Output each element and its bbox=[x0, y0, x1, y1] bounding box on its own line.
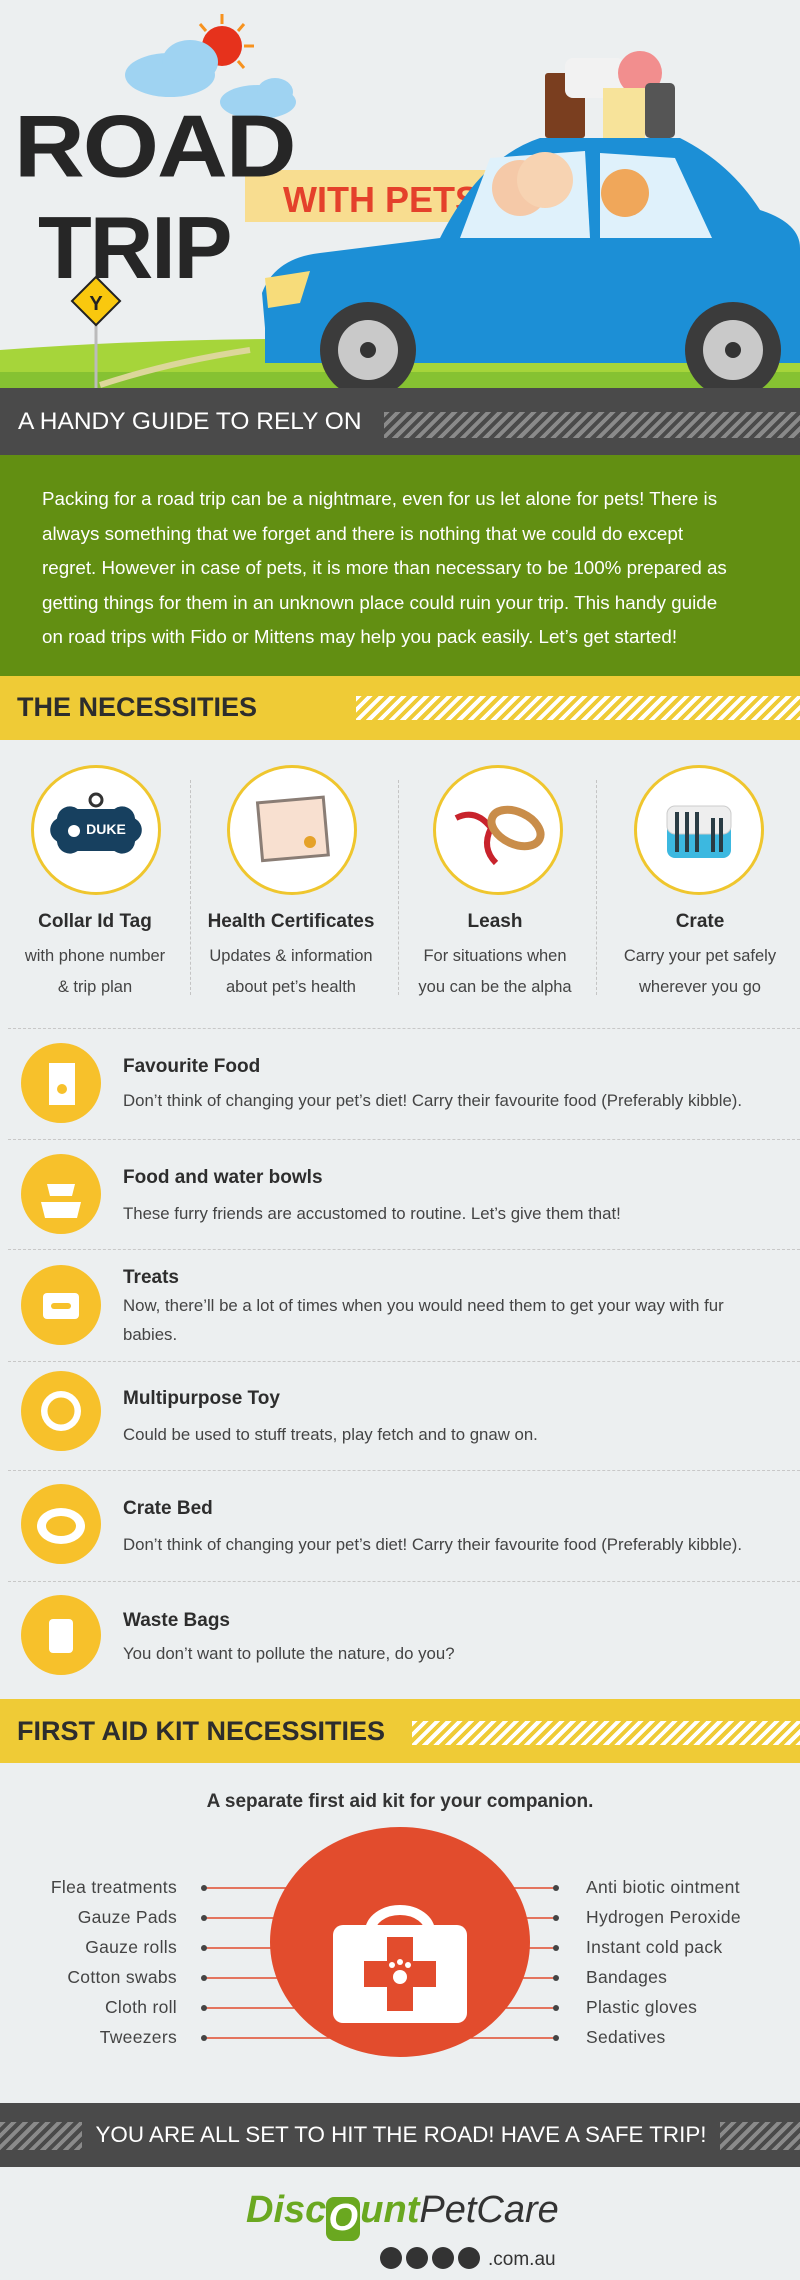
chart: first aid kit list: Anti biotic ointment bbox=[586, 1877, 740, 1897]
intro text: getting things for them in an unknown place could ruin your trip. This handy guide bbox=[42, 592, 717, 612]
heading: first aid kit: FIRST AID KIT NECESSITIES bbox=[17, 1716, 385, 1746]
item: waste bags: Waste Bags bbox=[123, 1610, 230, 1631]
item: treats bbox=[21, 1265, 724, 1345]
item: crate bed: Crate Bed bbox=[123, 1498, 213, 1519]
text: crate: wherever you go bbox=[639, 978, 761, 996]
item: food and water bowls: Food and water bowls bbox=[123, 1167, 323, 1188]
item: treats: Treats bbox=[123, 1267, 179, 1288]
item: crate bed bbox=[21, 1484, 742, 1564]
item: multipurpose toy bbox=[21, 1371, 538, 1451]
intro text bbox=[42, 488, 727, 647]
item: food and water bowls bbox=[21, 1154, 621, 1234]
item: favourite food bbox=[21, 1043, 742, 1123]
item: waste bags bbox=[21, 1595, 455, 1675]
logo: .com.au bbox=[488, 2249, 556, 2270]
chart: first aid kit list bbox=[51, 1827, 741, 2057]
chart: first aid kit list: Cloth roll bbox=[105, 1997, 177, 2017]
subtitle: first aid: A separate first aid kit for your companion. bbox=[207, 1791, 593, 1812]
text: crate bbox=[624, 911, 776, 996]
text: health certificates: about pet’s health bbox=[226, 978, 356, 996]
intro text: always something that we forget and there is nothing that we could do except bbox=[42, 522, 683, 544]
heading text: A HANDY GUIDE TO RELY ON bbox=[18, 408, 362, 435]
icon: collar tag: DUKE bbox=[86, 821, 126, 837]
text: leash: For situations when bbox=[423, 947, 567, 965]
heading band: a handy guide bbox=[0, 388, 800, 455]
chart: first aid kit list: Tweezers bbox=[100, 2027, 177, 2047]
text: leash: you can be the alpha bbox=[418, 978, 572, 996]
heading: the necessities bbox=[0, 676, 800, 740]
text: collar id tag: with phone number bbox=[25, 947, 165, 965]
title: WITH PETS: WITH PETS bbox=[283, 179, 479, 220]
item: crate bed: Don’t think of changing your pet’s diet! Carry their favourite food (Preferably kibble). bbox=[123, 1535, 742, 1554]
item: favourite food: Don’t think of changing your pet’s diet! Carry their favourite food (Preferably kibble). bbox=[123, 1091, 742, 1110]
grass bbox=[0, 339, 800, 390]
intro panel bbox=[0, 455, 800, 676]
header illustration bbox=[0, 14, 800, 388]
text: collar id tag: Collar Id Tag bbox=[38, 911, 152, 932]
chart: first aid kit list: Gauze rolls bbox=[85, 1937, 177, 1957]
logo: O bbox=[328, 2197, 358, 2239]
intro text: on road trips with Fido or Mittens may help you pack easily. Let’s get started! bbox=[42, 626, 677, 647]
panel: necessities top row bbox=[24, 765, 776, 996]
icon: first aid kit bbox=[270, 1827, 530, 2057]
item: favourite food: Favourite Food bbox=[123, 1056, 260, 1077]
chart: first aid kit list: Bandages bbox=[586, 1967, 667, 1987]
heading: the necessities: THE NECESSITIES bbox=[17, 692, 257, 722]
text: crate: Carry your pet safely bbox=[624, 947, 776, 965]
footer text: YOU ARE ALL SET TO HIT THE ROAD! HAVE A SAFE TRIP! bbox=[96, 2122, 706, 2147]
text: leash: Leash bbox=[468, 911, 522, 932]
text: collar id tag bbox=[24, 911, 165, 996]
text: leash bbox=[418, 911, 572, 996]
text: health certificates bbox=[208, 911, 374, 996]
text: crate: Crate bbox=[676, 911, 724, 932]
chart: first aid kit list: Instant cold pack bbox=[586, 1937, 722, 1957]
icon: clouds bbox=[125, 40, 296, 119]
item: food and water bowls: These furry friends are accustomed to routine. Let’s give them that! bbox=[123, 1204, 621, 1223]
chart: first aid kit list: Sedatives bbox=[586, 2027, 666, 2047]
chart: first aid kit list: Cotton swabs bbox=[67, 1967, 177, 1987]
logo: Disc untPetCare bbox=[246, 2189, 559, 2231]
chart: first aid kit list: Gauze Pads bbox=[78, 1907, 177, 1927]
text: collar id tag: & trip plan bbox=[58, 978, 132, 996]
heading: first aid kit bbox=[0, 1699, 800, 1763]
logo bbox=[246, 2189, 559, 2270]
icon: road sign bbox=[72, 277, 120, 388]
item: multipurpose toy: Multipurpose Toy bbox=[123, 1388, 280, 1409]
title: ROAD TRIP bbox=[14, 97, 295, 297]
icon: certificate bbox=[227, 765, 357, 895]
chart: first aid kit list: Hydrogen Peroxide bbox=[586, 1907, 741, 1927]
intro text: regret. However in case of pets, it is more than necessary to be 100% prepared as bbox=[42, 557, 727, 578]
icon: crate bbox=[634, 765, 764, 895]
car bbox=[262, 51, 800, 398]
title banner bbox=[245, 170, 525, 222]
title: ROAD TRIP: ROAD bbox=[14, 97, 295, 195]
item: treats: Now, there’ll be a lot of times when you would need them to get your way with fur babies. bbox=[123, 1296, 724, 1344]
icon: collar tag bbox=[31, 765, 161, 895]
item: waste bags: You don’t want to pollute the nature, do you? bbox=[123, 1644, 455, 1663]
intro text: Packing for a road trip can be a nightmare, even for us let alone for pets! There is bbox=[42, 488, 717, 509]
title: ROAD TRIP: TRIP bbox=[38, 198, 230, 297]
chart: first aid kit list: Plastic gloves bbox=[586, 1997, 697, 2017]
footer band bbox=[0, 2103, 800, 2167]
item: multipurpose toy: Could be used to stuff treats, play fetch and to gnaw on. bbox=[123, 1425, 538, 1444]
icon: leash bbox=[433, 765, 563, 895]
text: health certificates: Updates & information bbox=[209, 947, 373, 965]
chart: first aid kit list: Flea treatments bbox=[51, 1877, 177, 1897]
icon: road sign: Y bbox=[89, 293, 103, 315]
text: health certificates: Health Certificates bbox=[208, 911, 374, 932]
icon: sun bbox=[200, 14, 254, 68]
